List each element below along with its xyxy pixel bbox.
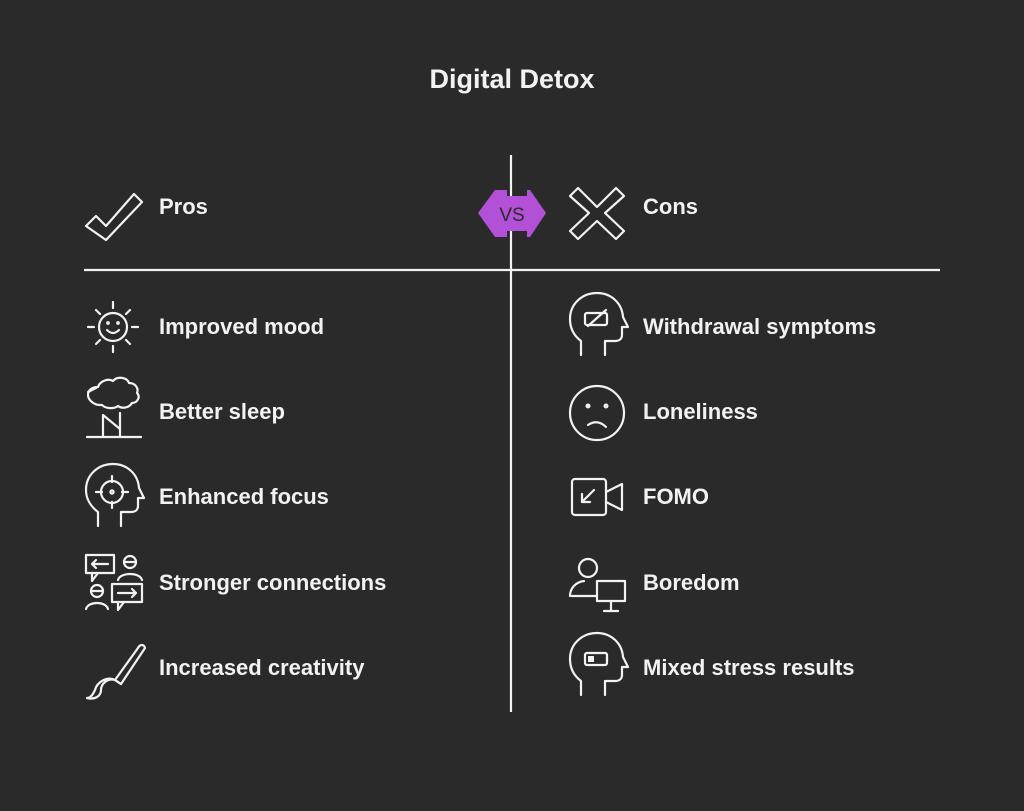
con item 2: Loneliness [643,399,758,424]
con item 3: FOMO [643,484,709,509]
icon: paintbrush [87,645,145,699]
pro item 2: Better sleep [159,399,285,424]
pro item 5: Increased creativity [159,655,364,680]
icon: tree [87,378,141,437]
icon: head focus [86,464,144,526]
icon: head low battery [570,293,628,355]
pro item 3: Enhanced focus [159,484,329,509]
icon: video call [572,479,622,515]
icon: checkmark [86,194,142,240]
pro item 1: Improved mood [159,314,324,339]
icon: conversation [86,555,142,610]
con item 5: Mixed stress results [643,655,855,680]
con item 1: Withdrawal symptoms [643,314,876,339]
vs badge [478,190,546,237]
icon: cross [570,188,624,239]
con item 4: Boredom [643,570,740,595]
icon: sun smile [88,302,138,352]
title: Digital Detox [429,64,595,94]
heading: Cons: Cons [643,194,698,219]
pro item 4: Stronger connections [159,570,386,595]
icon: head battery [570,633,628,695]
pros list [159,314,386,680]
cons list [643,314,876,680]
icon: sad face [570,386,624,440]
icon: person with monitor [570,559,625,611]
heading: Pros: Pros [159,194,208,219]
vs badge: VS [499,205,525,226]
